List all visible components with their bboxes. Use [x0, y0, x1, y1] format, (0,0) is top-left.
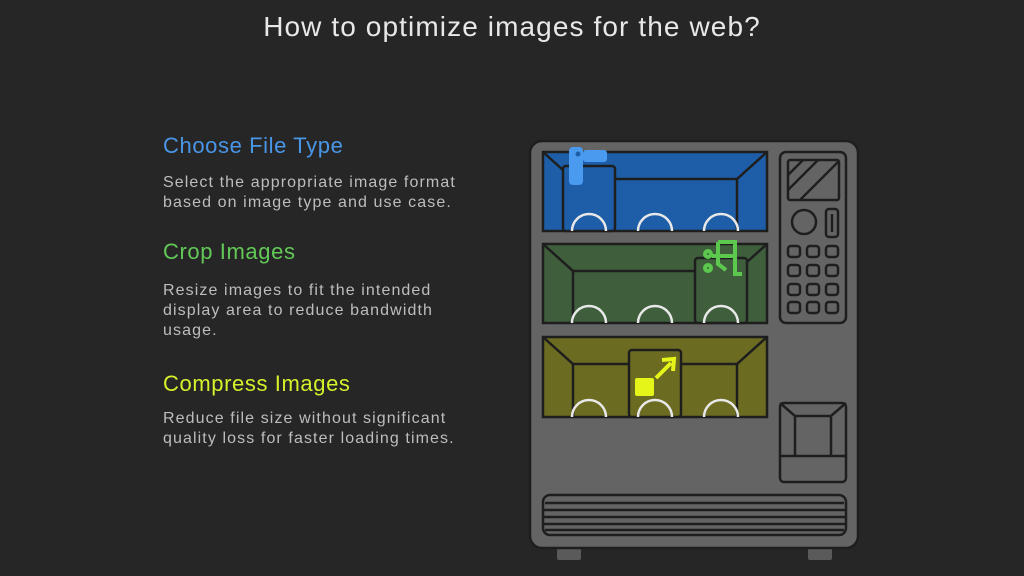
title: How to optimize images for the web? [263, 11, 761, 42]
vent grille [543, 495, 846, 535]
shelf: green [543, 242, 767, 323]
text: choose file type: Select the appropriate image format [163, 174, 456, 191]
text: choose file type [163, 174, 456, 211]
text: compress images: quality loss for faster loading times. [163, 430, 455, 447]
text: crop images [163, 282, 433, 339]
shelf: yellow [543, 337, 767, 417]
icon: compress [635, 359, 674, 396]
icon: file type [569, 147, 607, 185]
text: compress images [163, 410, 455, 447]
control panel [780, 152, 846, 323]
machine body [530, 141, 858, 548]
text: crop images: usage. [163, 322, 218, 339]
text: choose file type: based on image type and use case. [163, 194, 452, 211]
heading: crop images: Crop Images [163, 239, 296, 264]
text: compress images: Reduce file size without significant [163, 410, 446, 427]
dispenser tray [780, 403, 846, 482]
heading: compress images: Compress Images [163, 371, 351, 396]
icon: crop [705, 242, 742, 274]
shelf: blue [543, 147, 767, 231]
text: crop images: display area to reduce bandwidth [163, 302, 433, 319]
machine feet [557, 545, 832, 560]
heading: choose file type: Choose File Type [163, 133, 343, 158]
text: crop images: Resize images to fit the intended [163, 282, 431, 299]
